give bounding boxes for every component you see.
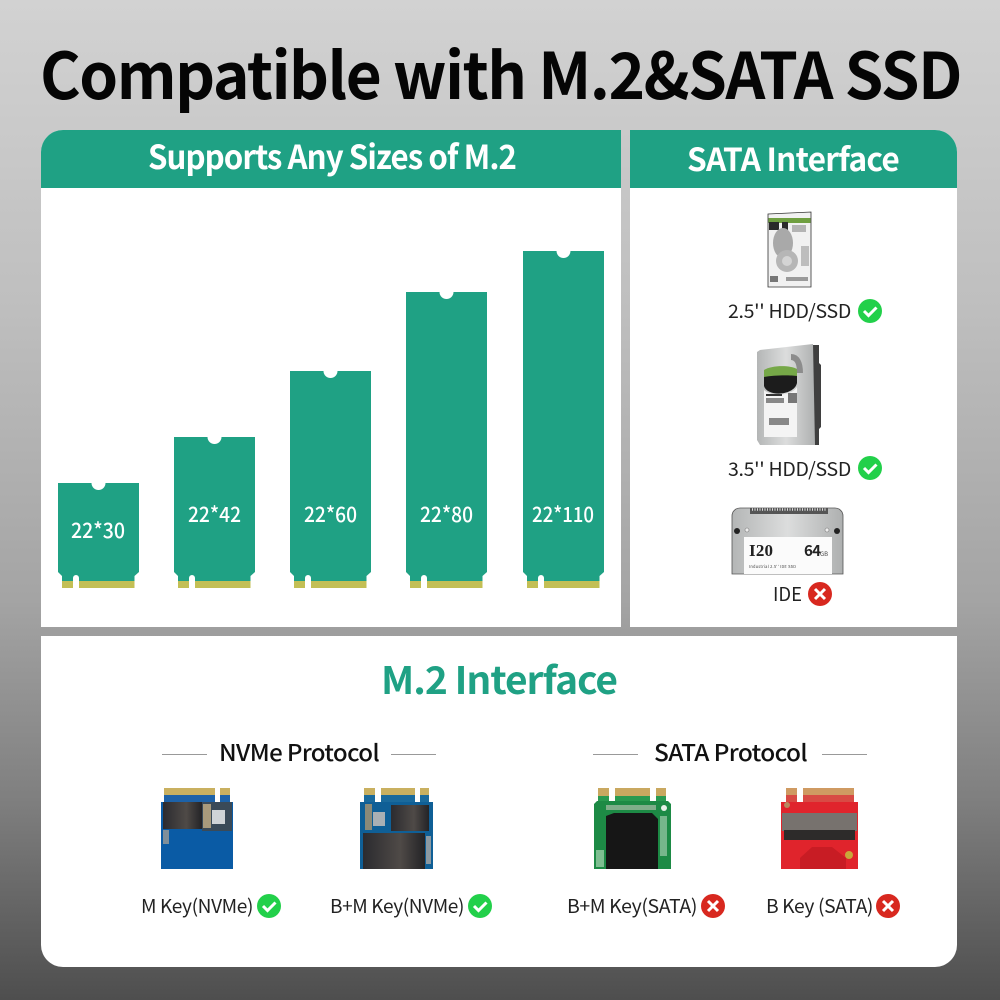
image: IDE drive: GB <box>820 549 828 558</box>
card: 22*80 <box>406 292 487 588</box>
icon: cross <box>876 894 900 918</box>
image: IDE drive: Industrial 2.5'' IDE SSD <box>749 564 796 570</box>
card: 22*42 <box>174 437 255 588</box>
card: 22*42: 22*42 <box>188 499 241 529</box>
icon: cross <box>701 894 725 918</box>
heading: SATA Interface: SATA Interface <box>687 135 899 181</box>
image: B+M key NVMe <box>360 788 433 869</box>
image: IDE drive: 64 <box>804 540 821 561</box>
image: B+M key SATA <box>594 788 671 869</box>
image: IDE drive: I20 <box>749 541 773 560</box>
panel: SATA interface <box>630 130 957 627</box>
card: 22*30: 22*30 <box>71 515 125 545</box>
label: B+M Key(NVMe): B+M Key(NVMe) <box>330 892 464 919</box>
card: 22*30 <box>58 483 139 588</box>
label: 2.5 HDD/SSD: 2.5'' HDD/SSD <box>728 297 851 324</box>
card: 22*110 <box>523 251 604 588</box>
panel header: M.2 sizes <box>41 130 621 188</box>
heading: M.2 Interface: M.2 Interface <box>381 650 617 705</box>
image: B key SATA <box>781 788 858 869</box>
title: Compatible with M.2&SATA SSD <box>40 26 961 118</box>
card: 22*80: 22*80 <box>420 499 473 529</box>
icon: check <box>468 894 492 918</box>
label: B Key (SATA): B Key (SATA) <box>766 892 873 919</box>
icon: check <box>858 299 882 323</box>
panel: M.2 sizes <box>41 130 621 627</box>
image: 3.5 inch drive <box>757 344 821 445</box>
icon: check <box>257 894 281 918</box>
card: 22*110: 22*110 <box>532 499 594 529</box>
subheading: SATA Protocol: SATA Protocol <box>654 734 808 768</box>
image: M key NVMe <box>161 788 233 869</box>
label: 3.5 HDD/SSD: 3.5'' HDD/SSD <box>728 455 851 482</box>
icon: cross <box>808 582 832 606</box>
card: 22*60: 22*60 <box>304 499 357 529</box>
label: M Key(NVMe): M Key(NVMe) <box>141 892 253 919</box>
panel: M.2 interface <box>41 636 957 967</box>
card: 22*60 <box>290 371 371 588</box>
subheading: NVMe Protocol: NVMe Protocol <box>219 734 380 768</box>
label: IDE: IDE <box>773 580 802 607</box>
icon: check <box>858 456 882 480</box>
image: 2.5 inch drive <box>768 212 811 287</box>
image: IDE drive <box>732 508 843 574</box>
label: B+M Key(SATA): B+M Key(SATA) <box>567 892 697 919</box>
heading: Supports Any Sizes of M.2: Supports Any Sizes of M.2 <box>148 131 516 179</box>
panel header: SATA <box>630 130 957 188</box>
